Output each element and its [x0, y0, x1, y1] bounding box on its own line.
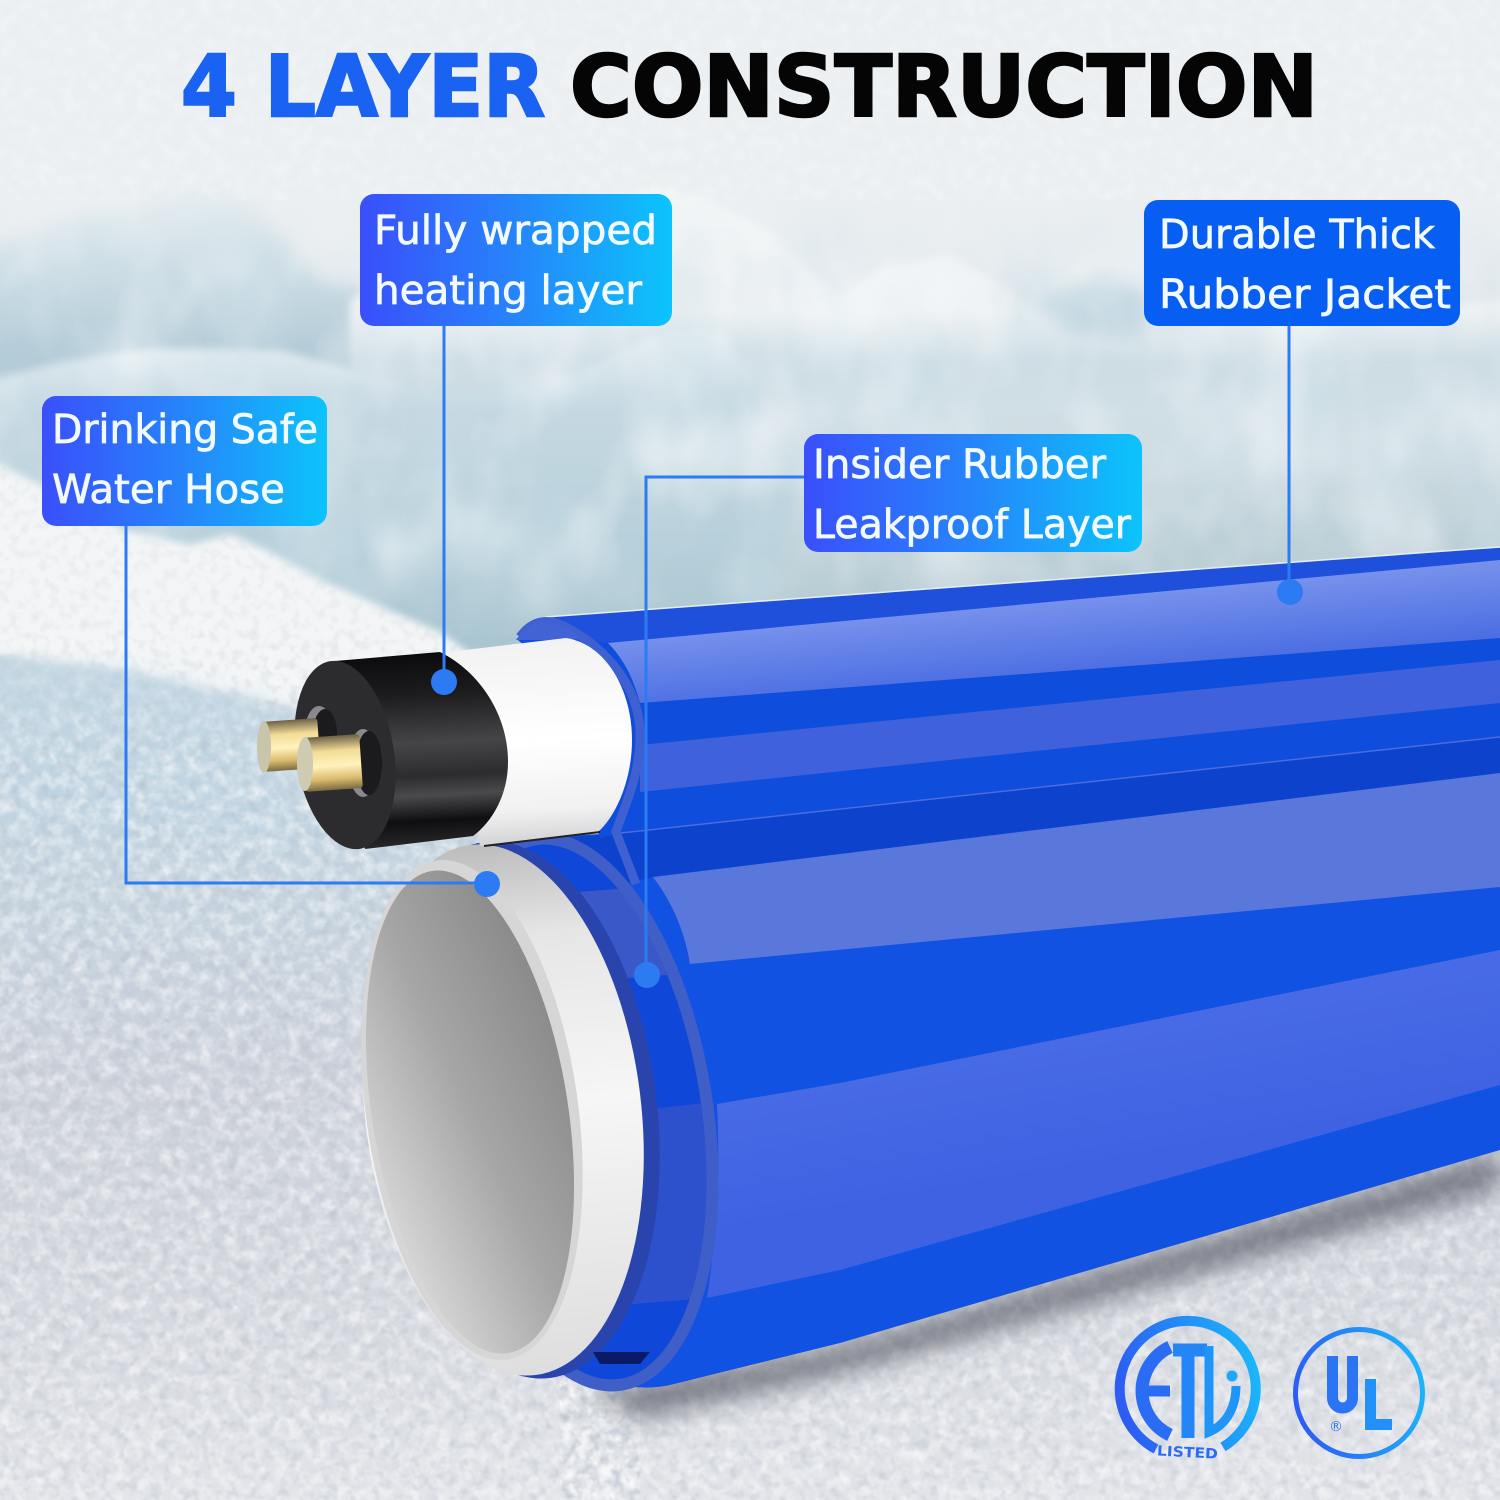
callout: fully wrapped heating layer: heating layer — [374, 268, 643, 314]
callout: drinking safe water hose: Drinking Safe — [52, 407, 318, 453]
heating layer: white wrap — [440, 638, 632, 846]
lower hose: leakproof layer ring — [470, 837, 718, 1392]
title: CONSTRUCTION — [570, 38, 1318, 137]
lower hose: rubber jacket body — [560, 737, 1500, 1388]
callout: insider rubber leakproof layer: Insider Rubber — [813, 442, 1107, 488]
callout: insider rubber leakproof layer: Leakproof Layer — [813, 502, 1132, 548]
icon: UL mark: ® — [1329, 1419, 1343, 1435]
icon: ETL listed mark: LISTED — [1157, 1443, 1218, 1463]
icon: ETL listed mark — [1120, 1321, 1256, 1463]
title — [181, 38, 1318, 137]
callout: fully wrapped heating layer: Fully wrapped — [374, 208, 657, 254]
title: 4 LAYER — [181, 38, 545, 137]
callout: durable thick rubber jacket: Durable Thick — [1159, 212, 1436, 258]
callout: durable thick rubber jacket — [1144, 200, 1460, 605]
icon: UL mark — [1296, 1330, 1422, 1456]
callout: durable thick rubber jacket: Rubber Jacket — [1159, 272, 1451, 318]
heating layer: black core — [282, 652, 508, 856]
upper hose: rubber jacket — [516, 547, 1500, 884]
callout: drinking safe water hose: Water Hose — [52, 467, 285, 513]
callout: fully wrapped heating layer — [360, 194, 672, 695]
shadow under hose — [590, 1152, 1500, 1420]
brass pins — [257, 706, 382, 797]
callout: insider rubber leakproof layer — [634, 434, 1142, 988]
lower hose: drinking safe water hose — [332, 828, 673, 1392]
callout: drinking safe water hose — [42, 396, 500, 897]
